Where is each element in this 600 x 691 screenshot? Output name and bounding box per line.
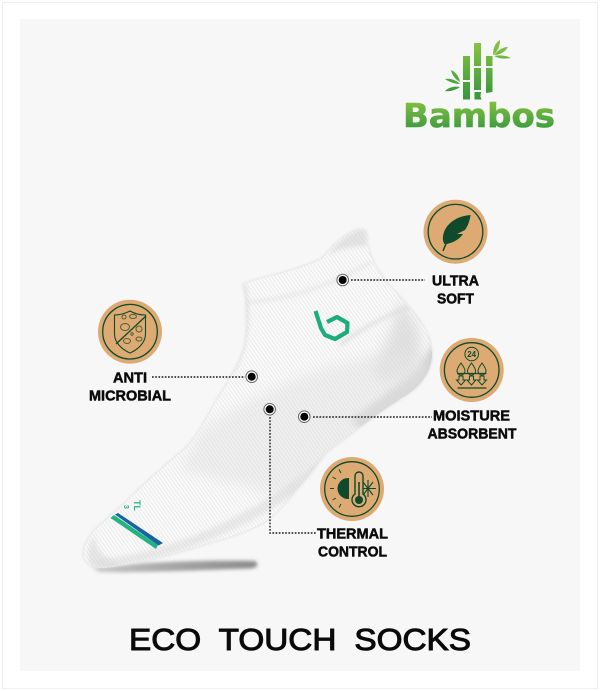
marker dot <box>337 274 349 286</box>
feature: ultra soft <box>337 200 488 308</box>
icon: feather <box>424 200 488 264</box>
feature: anti microbial <box>89 300 258 404</box>
label: THERMAL <box>317 526 388 542</box>
sock edge glow <box>84 229 432 568</box>
icon: droplets and arrows: 24 <box>467 350 477 359</box>
icon: thermometer sun snowflake <box>320 457 384 521</box>
feature: thermal control <box>264 404 388 560</box>
label: MOISTURE <box>433 408 510 424</box>
marker dot <box>298 411 310 423</box>
icon: droplets and arrows <box>440 338 504 402</box>
sock illustration: 3 <box>122 505 129 509</box>
label: CONTROL <box>318 544 387 560</box>
sock ground shadow <box>92 561 257 572</box>
label: ULTRA <box>432 272 479 290</box>
label: SOFT <box>437 290 474 308</box>
label: ANTI <box>113 370 147 386</box>
feature: moisture absorbent <box>298 338 516 442</box>
icon: shield with bacteria <box>98 300 162 364</box>
brand logo <box>403 40 555 135</box>
connector line <box>351 279 425 281</box>
connector line <box>270 417 316 533</box>
icon: bamboo stalks <box>445 40 511 100</box>
sock logo mark <box>316 311 348 339</box>
logo wordmark: Bambos <box>403 96 555 135</box>
marker dot <box>264 404 276 415</box>
connector line <box>152 376 245 378</box>
toe tiny text: TL <box>132 500 142 511</box>
sock shading and knit texture <box>80 225 450 575</box>
label: MICROBIAL <box>89 388 171 404</box>
sock illustration <box>80 225 450 575</box>
title: ECO TOUCH SOCKS <box>129 623 471 657</box>
toe stripes <box>110 513 163 549</box>
sock body <box>84 229 432 568</box>
label: ABSORBENT <box>428 426 516 442</box>
connector line <box>313 416 432 418</box>
marker dot <box>246 371 258 383</box>
